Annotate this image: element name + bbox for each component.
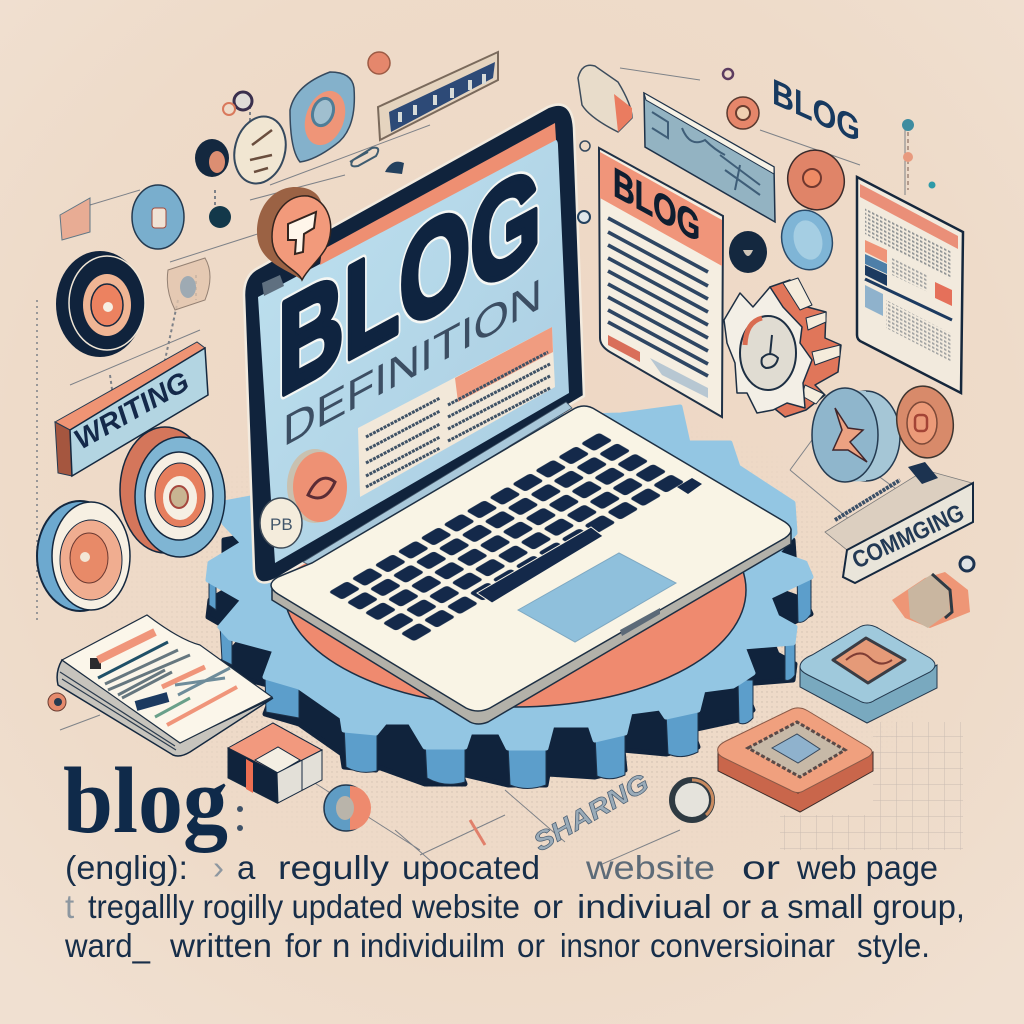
document footer blocks <box>608 335 640 362</box>
page mid text <box>892 258 928 292</box>
notebook content <box>90 658 101 669</box>
definition line 2: website <box>411 888 520 925</box>
extra right keys <box>677 478 702 494</box>
definition line 3 <box>64 927 930 964</box>
cube icon <box>228 723 322 803</box>
screen icon PB badge <box>260 498 302 548</box>
document header <box>600 152 722 266</box>
notebook ring tag <box>48 693 66 711</box>
blue sketched sheet <box>644 93 775 222</box>
blog colon <box>237 806 243 831</box>
writing banner <box>55 342 208 476</box>
screen title bar <box>320 123 556 265</box>
definition line 3: ward_ <box>64 927 151 964</box>
laptop base side <box>272 530 791 724</box>
banner pin <box>908 462 938 484</box>
definition line 2: or <box>533 888 563 925</box>
definition line 3: for <box>285 927 322 964</box>
pin icon with T <box>257 187 331 280</box>
page lower text <box>886 300 952 362</box>
definition line 2: or a small group, <box>722 888 965 925</box>
background sketch lines <box>37 68 925 865</box>
definition line 1: upocated <box>402 849 540 886</box>
BLOG heading on screen: BLOG <box>278 137 541 426</box>
gear face <box>724 287 812 413</box>
front notch <box>620 608 660 636</box>
blog heading: blog <box>63 749 228 853</box>
screen icon orange coin <box>287 449 347 523</box>
definition line 1: web page <box>796 849 938 886</box>
blue coin <box>775 205 839 275</box>
small orange coin <box>727 97 759 129</box>
screen document <box>358 327 555 497</box>
left target icon <box>56 251 145 357</box>
orange tile icon <box>718 708 873 812</box>
writing banner: WRITING <box>69 366 194 455</box>
paperclip <box>350 148 378 166</box>
gear tooth faces <box>209 572 811 788</box>
gear face ring <box>740 316 796 390</box>
definition line 1: website <box>585 849 715 886</box>
page light block <box>865 285 883 316</box>
page orange square <box>935 282 952 306</box>
gear tooth highlights <box>783 278 840 404</box>
hinge strip <box>303 402 572 566</box>
laptop base top <box>271 406 791 711</box>
salmon disc <box>284 473 746 707</box>
right page panel <box>857 177 963 393</box>
small purple ring <box>723 69 733 79</box>
sharing label: SHARNG <box>528 767 654 857</box>
page color blocks <box>865 240 887 263</box>
concentric target icon <box>120 427 225 557</box>
gear base <box>208 407 811 788</box>
definition line 1 <box>65 849 938 886</box>
definition line 2: t <box>65 888 74 925</box>
orange coin <box>779 142 853 218</box>
definition line 3: individuilm <box>360 927 505 964</box>
banner front <box>843 483 973 583</box>
arrow coin <box>812 388 900 482</box>
small dark coin <box>195 139 229 177</box>
definition line 3: insnor <box>560 927 640 964</box>
gear extruded side <box>770 280 841 417</box>
orange coin right <box>891 382 959 462</box>
gear hand <box>762 335 778 368</box>
banner top face <box>825 470 972 550</box>
definition line 1: or <box>742 849 780 886</box>
small lock <box>580 141 590 151</box>
blog document panel <box>599 148 723 417</box>
small blue figure <box>385 162 404 174</box>
blue circle icon <box>132 185 184 249</box>
orange bag icon <box>892 557 974 628</box>
faint sketch icon <box>167 258 210 310</box>
definition line 2 <box>65 888 965 925</box>
gear top face <box>208 407 811 748</box>
definition line 3: written <box>169 927 272 964</box>
BLOG tilted label: BLOG <box>772 72 860 151</box>
page long line <box>865 279 952 320</box>
keyboard <box>324 430 689 644</box>
definition text <box>64 849 965 964</box>
commenting banner: COMMGING <box>848 499 968 574</box>
document text lines <box>608 218 708 376</box>
BLOG heading on screen: BLOG <box>278 137 541 426</box>
dark ring <box>729 231 767 273</box>
small button <box>578 211 590 223</box>
orange top dot <box>368 52 390 74</box>
small ring coin <box>324 785 371 831</box>
small ring cluster <box>234 92 252 110</box>
screen corner widget <box>262 275 284 296</box>
laptop <box>244 105 791 724</box>
definition line 3: conversioinar <box>650 927 835 964</box>
cream speech icon <box>578 65 632 132</box>
definition line 1: regully <box>278 849 390 886</box>
document BLOG label: BLOG <box>613 159 700 252</box>
top sketch icon <box>60 198 90 240</box>
screen icon PB badge: PB <box>270 515 293 534</box>
page header <box>860 184 958 249</box>
blue tile icon <box>800 625 937 723</box>
definition line 1: a <box>237 849 256 886</box>
gear dark side wall <box>208 444 811 785</box>
dotted ground texture <box>136 466 908 852</box>
definition line 3: style. <box>857 927 930 964</box>
top right icons <box>578 65 936 275</box>
commenting banner <box>825 462 973 583</box>
laptop lid <box>244 105 584 582</box>
settings gear <box>724 278 841 417</box>
space bar <box>477 527 603 603</box>
DEFINITION subheading: DEFINITION <box>283 268 542 456</box>
notebook icon <box>48 615 273 756</box>
definition line 1: (englig): <box>65 849 188 886</box>
notebook pages edge <box>57 660 273 756</box>
page dotted text <box>865 207 952 280</box>
definition line 2: indiviual <box>577 888 712 925</box>
cream note coin <box>227 111 293 189</box>
grid floor <box>780 722 963 850</box>
definition line 2: tregallly rogilly updated <box>88 888 403 925</box>
trackpad <box>518 553 676 642</box>
definition line 1: › <box>213 849 224 886</box>
blue swirl app icon <box>290 72 354 162</box>
coin icon left <box>37 501 130 611</box>
top left icon cluster <box>60 52 498 310</box>
definition line 3: or <box>517 927 545 964</box>
notebook page <box>62 615 272 743</box>
dark dot <box>209 206 231 228</box>
teal marker <box>907 132 909 190</box>
definition line 3: n <box>332 927 350 964</box>
screen <box>258 140 569 563</box>
ring icon <box>672 780 713 820</box>
label banner <box>378 52 498 140</box>
